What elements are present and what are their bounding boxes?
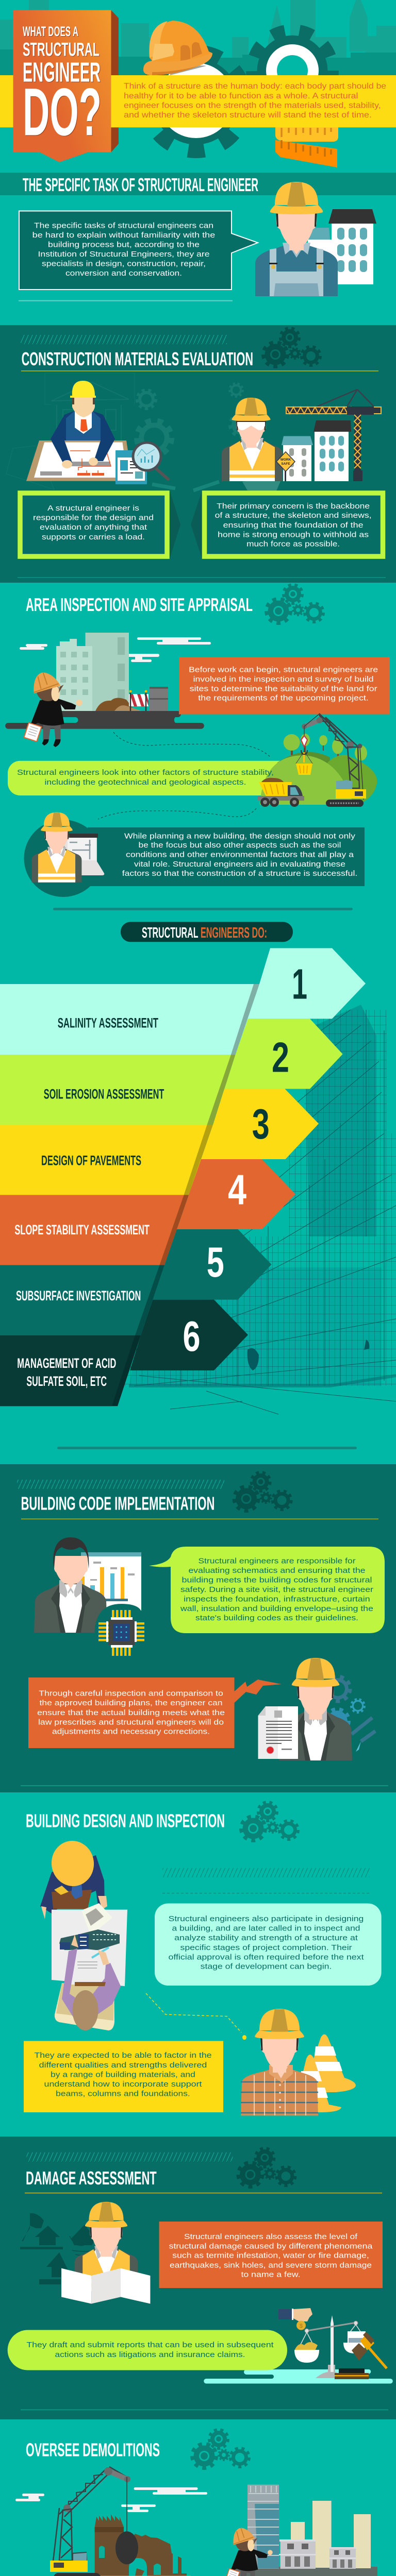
- icon: gears: [263, 328, 320, 366]
- icon: gears: [192, 2430, 249, 2468]
- illustration: worker and building: [255, 182, 376, 296]
- callout: specific tasks: specialists in design, construction, repair,: [42, 260, 206, 268]
- illustration: hills, crane and truck: [258, 714, 377, 807]
- intro text: Think of a structure as the human body: each body part should be: [124, 82, 386, 91]
- callout pill: reports: They draft and submit reports that can be used in subsequent: [27, 2341, 274, 2349]
- panel: primary concern: ensuring that the foundation of the: [223, 521, 364, 530]
- text: stability: including the geotechnical and geological aspects.: [44, 778, 246, 787]
- callout: inspection: involved in the inspection and survey of build: [193, 675, 374, 684]
- list row 5: subsurface investigation: 5: [207, 1238, 224, 1286]
- list row 6: management of acid sulfate soil: 6: [183, 1312, 200, 1360]
- intro text: and whether the skeleton structure will stand the test of time.: [124, 111, 372, 120]
- callout: structural damage: to name a few.: [241, 2270, 300, 2279]
- callout: specific tasks: be hard to explain without familiarity with the: [32, 231, 215, 240]
- callout: building materials: understand how to incorporate support: [44, 2080, 202, 2089]
- section background: construction materials: [0, 325, 396, 583]
- title banner: [13, 10, 111, 162]
- panel: structural engineer responsibility: supports or carries a load.: [42, 533, 145, 541]
- illustration: top-view meeting at table: [40, 1838, 127, 2030]
- list row 6: management of acid sulfate soil: SULFATE SOIL, ETC: [26, 1374, 107, 1389]
- icon: large gear with ring: [148, 54, 243, 149]
- callout: inspection: sites to determine the suitability of the land for: [190, 684, 377, 693]
- list row 3: design of pavements: 3: [252, 1100, 270, 1148]
- callout connectors: [170, 490, 202, 559]
- icon: measuring tape: [275, 124, 338, 167]
- speech bubble: evaluating schematics: inspects the foundation, infrastructure, curtain: [184, 1595, 370, 1603]
- panel: new building design: While planning a new building, the design should not only: [124, 832, 356, 841]
- panel: new building design: factors so that the construction of a structure is successful.: [122, 869, 357, 878]
- stripes decoration: [162, 1868, 370, 1877]
- callout: structural damage: such as termite infestation, water or fire damage,: [172, 2251, 369, 2260]
- list row 3: design of pavements: DESIGN OF PAVEMENTS: [41, 1153, 141, 1168]
- panel: structural engineer responsibility: evaluation of anything that: [40, 523, 147, 532]
- panel: primary concern: of a structure, the skeleton and sinews,: [215, 511, 372, 520]
- callout: structural damage: structural damage caused by different phenomena: [169, 2242, 373, 2250]
- illustration: worker with traffic cones: [241, 2009, 356, 2115]
- panel: structural engineer responsibility: [20, 493, 167, 556]
- heading: damage assessment: DAMAGE ASSESSMENT: [26, 2167, 157, 2189]
- stripes decoration: [17, 1480, 224, 1489]
- speech bubble: evaluating schematics: [149, 1547, 385, 1633]
- stripes decoration: [26, 2153, 233, 2162]
- panel: primary concern: [204, 493, 383, 556]
- illustration: scales of justice with gavel: $: [300, 2323, 303, 2329]
- illustration: worker with map and damaged houses: [20, 2202, 150, 2304]
- dashed connector with dot: [146, 1993, 246, 2040]
- speech bubble: evaluating schematics: building meets the building codes for structural: [182, 1576, 372, 1585]
- speech bubble: evaluating schematics: state's building codes as their guidelines.: [195, 1614, 358, 1622]
- panel: primary concern: much force as possible.: [246, 540, 340, 549]
- title text: STRUCTURAL: [23, 39, 100, 60]
- icon: gears: [241, 1802, 298, 1840]
- icon: gears: [235, 1472, 291, 1511]
- callout: structural damage: Structural engineers also assess the level of: [184, 2232, 358, 2241]
- intro text: [124, 82, 386, 120]
- list row 2: soil erosion assessment: SOIL EROSION ASSESSMENT: [44, 1086, 164, 1101]
- ground platform: [5, 711, 204, 729]
- callout: careful inspection: Through careful inspection and comparison to: [39, 1689, 223, 1698]
- callout: specific tasks: Institution of Structural Engineers, they are: [38, 250, 209, 259]
- section background: introduction: [0, 0, 396, 325]
- section background: building code: [0, 1464, 396, 1792]
- list row 5: subsurface investigation: [0, 1229, 271, 1335]
- intro band: [0, 75, 396, 127]
- list row 6: management of acid sulfate soil: MANAGEMENT OF ACID: [17, 1355, 116, 1371]
- section background: building design: [0, 1792, 396, 2137]
- callout: building materials: by a range of building materials, and: [51, 2070, 195, 2079]
- callout: building materials: beams, columns and foundations.: [56, 2090, 190, 2098]
- icon: hard hat: [143, 21, 212, 75]
- icon: gears: [267, 585, 323, 623]
- section background: demolitions: [0, 2419, 396, 2576]
- callout: building materials: different qualities and strengths delivered: [39, 2061, 207, 2070]
- list row 3: design of pavements: [0, 1089, 319, 1195]
- list row 4: slope stability assessment: [0, 1159, 295, 1265]
- heading pill: structural engineers do: [121, 922, 293, 942]
- illustration: worker with crane and buildings: SAFE: [281, 462, 290, 466]
- callout: careful inspection: the approved building plans, the engineer can: [39, 1699, 223, 1707]
- blueprint building backdrop: [124, 1005, 396, 1414]
- speech bubble: evaluating schematics: wall, insulation and building envelope–using the: [180, 1604, 373, 1613]
- section background: area inspection: [0, 583, 396, 1464]
- callout: specific tasks: [19, 211, 258, 290]
- illustration: worker with crane and buildings: WORK: [280, 458, 291, 462]
- title text: ENGINEER: [23, 57, 101, 88]
- callout: specific tasks: building process but, according to the: [48, 241, 200, 249]
- heading: area inspection and site appraisal: AREA INSPECTION AND SITE APPRAISAL: [26, 594, 253, 615]
- illustration: buildings, soil and barrier: [5, 633, 211, 729]
- callout: specific tasks: conversion and conservation.: [65, 269, 182, 278]
- illustration: surveyor: [24, 672, 82, 747]
- panel: new building design: be the focus but also other aspects such as the soil: [138, 841, 341, 850]
- callout: participate in designing: specific stages of project completion. Their: [180, 1943, 352, 1952]
- icon: gears: [239, 2148, 295, 2187]
- callout: structural damage: [159, 2222, 383, 2288]
- callout: building materials: [24, 2041, 223, 2112]
- icon: second gear with ring: [253, 31, 332, 110]
- list row 1: salinity assessment: [0, 948, 366, 1055]
- heading: building code implementation: BUILDING CODE IMPLEMENTATION: [21, 1493, 214, 1514]
- callout: careful inspection: adjustments and necessary corrections.: [52, 1727, 210, 1736]
- callout: participate in designing: a building, and are later called in to inspect and: [172, 1924, 360, 1933]
- section background: damage assessment: [0, 2137, 396, 2419]
- heading pill: structural engineers do: ENGINEERS DO:: [201, 925, 267, 941]
- list row 1: salinity assessment: SALINITY ASSESSMENT: [58, 1015, 158, 1030]
- callout: participate in designing: Structural engineers also participate in designing: [169, 1914, 364, 1923]
- illustration: worker with laptop: [32, 812, 104, 883]
- speech bubble: evaluating schematics: evaluating schematics and ensuring that the: [189, 1566, 365, 1575]
- illustration: crane demolishing castle: [15, 2467, 207, 2576]
- speech bubble: evaluating schematics: Structural engineers are responsible for: [198, 1557, 356, 1566]
- callout pill: reports: [8, 2330, 287, 2370]
- callout: building materials: They are expected to be able to factor in the: [34, 2051, 211, 2060]
- panel: primary concern: home is strong enough to withhold as: [218, 530, 369, 539]
- panel: primary concern: Their primary concern is the backbone: [217, 502, 370, 511]
- panel: new building design: conditions and other environmental factors that all play a: [126, 851, 354, 859]
- panel: new building design: vital role. Structural engineers aid in evaluating these: [134, 860, 345, 869]
- intro text: engineer focuses on the strength of the materials used, stability,: [124, 101, 381, 110]
- intro text: healthy for it to be able to function as a whole. A structural: [124, 92, 358, 100]
- callout: participate in designing: stage of development can begin.: [201, 1962, 332, 1971]
- illustration: man with chart and chip: [34, 1537, 144, 1656]
- heading: building design and inspection: BUILDING DESIGN AND INSPECTION: [26, 1810, 225, 1831]
- dashed path lower: [98, 808, 256, 819]
- callout: careful inspection: ensure that the actual building meets what the: [37, 1708, 225, 1717]
- illustration: engineer at drafting table: [26, 381, 168, 484]
- title text: [23, 24, 102, 149]
- illustration: surveyor and city: [225, 2485, 377, 2576]
- callout: participate in designing: analyze stability and strength of a structure at: [174, 1934, 358, 1942]
- list row 4: slope stability assessment: 4: [228, 1165, 246, 1213]
- stripes decoration: [21, 335, 227, 344]
- list row 2: soil erosion assessment: [0, 1019, 343, 1125]
- callout: structural damage: earthquakes, sink holes, and severe storm damage: [170, 2261, 372, 2269]
- callout pill: reports: actions such as litigations and insurance claims.: [55, 2350, 245, 2359]
- title text: DO?: [23, 74, 102, 149]
- illustration: scales of justice with gavel: [278, 2308, 387, 2379]
- speech bubble: evaluating schematics: safety. During a site visit, the structural engineer: [180, 1585, 373, 1594]
- callout: careful inspection: [28, 1677, 282, 1748]
- skyline backdrop: [0, 0, 396, 75]
- title text: WHAT DOES A: [23, 24, 78, 39]
- illustration: scale platform: [204, 2369, 393, 2383]
- dashed path upper: [113, 732, 271, 758]
- callout: careful inspection: law prescribes and structural engineers will do: [38, 1718, 224, 1726]
- text: stability: [17, 768, 274, 787]
- panel: structural engineer responsibility: A structural engineer is: [47, 504, 139, 513]
- callout: inspection: [179, 657, 390, 714]
- text: stability: Structural engineers look into other factors of structure stability,: [17, 768, 274, 777]
- faint backdrop: gears and blueprint outlines: [6, 373, 283, 492]
- fold of title banner: [59, 10, 119, 162]
- callout: participate in designing: [155, 1903, 382, 1986]
- heading pill: structural engineers do: STRUCTURAL: [142, 925, 198, 941]
- callout: participate in designing: official approval is often required before the next: [168, 1953, 364, 1961]
- list row 2: soil erosion assessment: 2: [272, 1033, 289, 1081]
- list row 4: slope stability assessment: SLOPE STABILITY ASSESSMENT: [14, 1222, 150, 1238]
- callout pill: stability: [8, 761, 296, 795]
- illustration: engineer with document and gears: [258, 1658, 375, 1760]
- list row 6: management of acid sulfate soil: [0, 1300, 248, 1406]
- panel: structural engineer responsibility: responsible for the design and: [33, 514, 154, 522]
- callout: inspection: Before work can begin, structural engineers are: [189, 666, 378, 674]
- list row 5: subsurface investigation: SUBSURFACE INVESTIGATION: [16, 1288, 141, 1303]
- heading: construction materials evaluation: CONSTRUCTION MATERIALS EVALUATION: [22, 348, 253, 369]
- callout: inspection: the requirements of the upcoming project.: [198, 694, 369, 703]
- panel: new building design: [24, 812, 365, 897]
- callout: specific tasks: The specific tasks of structural engineers can: [34, 222, 213, 230]
- heading: oversee demolitions: OVERSEE DEMOLITIONS: [26, 2439, 160, 2461]
- list row 1: salinity assessment: 1: [292, 960, 307, 1008]
- illustration: worker with crane and buildings: [222, 389, 381, 481]
